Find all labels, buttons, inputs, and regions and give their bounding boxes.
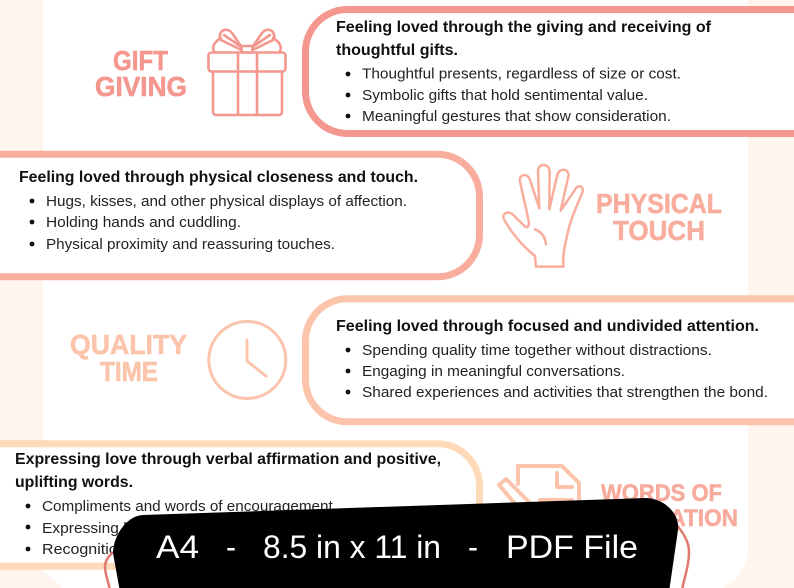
panel: gift giving description: Feeling loved through the giving and receiving of xyxy=(336,19,712,36)
banner: file format xyxy=(113,498,678,588)
heading: gift giving xyxy=(95,45,187,102)
panel: quality time description: Feeling loved through focused and undivided attention. xyxy=(336,318,759,335)
heading: physical touch xyxy=(596,188,722,246)
panel: gift giving description: Thoughtful presents, regardless of size or cost. xyxy=(362,66,681,82)
heading: quality time: TIME xyxy=(100,356,158,387)
heading: gift giving: GIVING xyxy=(95,71,187,102)
panel: gift giving description: thoughtful gifts. xyxy=(336,42,458,59)
icon: clock xyxy=(209,322,286,398)
heading: words of affirmation: AFFIRMATION xyxy=(584,505,738,532)
panel: gift giving description: Meaningful gestures that show consideration. xyxy=(362,108,671,125)
panel: quality time description: Shared experiences and activities that strengthen the bond. xyxy=(362,384,768,401)
panel: gift giving description xyxy=(306,10,794,134)
panel: words of affirmation description: Recognition of efforts and achievements. xyxy=(42,541,332,558)
icon: note and pencil xyxy=(499,466,579,530)
banner: red outline behind xyxy=(105,524,689,588)
panel: words of affirmation description: Compliments and words of encouragement. xyxy=(42,498,337,515)
panel: physical touch description: Feeling loved through physical closeness and touch. xyxy=(19,169,418,186)
section: gift giving xyxy=(95,10,794,134)
banner: file format: - xyxy=(468,529,478,565)
banner: file format: - xyxy=(226,529,236,565)
heading: physical touch: PHYSICAL xyxy=(596,188,722,219)
panel: physical touch description: Holding hands and cuddling. xyxy=(46,214,241,231)
panel: physical touch description xyxy=(0,154,480,277)
heading: words of affirmation xyxy=(584,480,738,532)
panel: gift giving description: Symbolic gifts that hold sentimental value. xyxy=(362,87,648,104)
panel: physical touch description: Hugs, kisses, and other physical displays of affection. xyxy=(46,193,407,210)
banner: file format: A4 xyxy=(156,529,199,565)
panel: words of affirmation description: Expressing love through verbal affirmation and positive, xyxy=(15,451,441,468)
heading: words of affirmation: WORDS OF xyxy=(601,480,722,507)
panel: words of affirmation description: uplifting words. xyxy=(15,474,133,491)
heading: physical touch: TOUCH xyxy=(613,215,705,246)
banner: file format: PDF File xyxy=(506,529,638,565)
panel: quality time description xyxy=(306,299,794,422)
icon: open hand xyxy=(503,165,583,267)
icon: gift box xyxy=(208,30,286,115)
section: physical touch xyxy=(0,154,722,277)
section: quality time xyxy=(70,299,794,422)
panel: words of affirmation description: Expressing love and appreciation verbally. xyxy=(42,520,332,537)
panel: quality time description: Engaging in meaningful conversations. xyxy=(362,363,625,380)
heading: gift giving: GIFT xyxy=(113,45,168,76)
panel: physical touch description: Physical proximity and reassuring touches. xyxy=(46,236,335,253)
heading: quality time: QUALITY xyxy=(70,329,187,360)
panel: quality time description: Spending quality time together without distractions. xyxy=(362,342,712,359)
section: words of affirmation xyxy=(0,444,738,566)
heading: quality time xyxy=(70,329,187,387)
banner: file format: 8.5 in x 11 in xyxy=(263,529,441,565)
panel: words of affirmation description xyxy=(0,444,480,566)
